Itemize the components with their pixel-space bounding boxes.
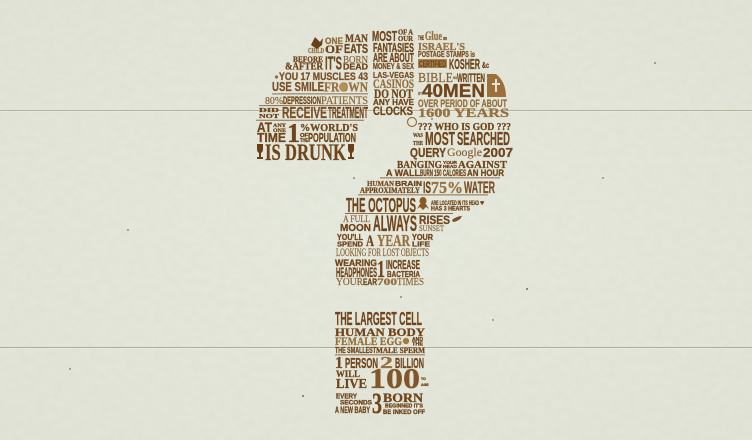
fact: who is god most searched query: 2007 bbox=[483, 146, 513, 160]
fact: headphones increase ear bacteria: WEARING bbox=[335, 258, 377, 269]
fact: 1 person in 2 billion will live to 100: LIVE bbox=[336, 376, 367, 391]
fact: fantasies about money and sex bbox=[372, 28, 414, 71]
fact: one percent is drunk: IS DRUNK bbox=[265, 140, 346, 165]
fact: man eats: CHILD bbox=[308, 47, 324, 55]
fact: 1 person in 2 billion will live to 100 bbox=[335, 353, 429, 395]
fact: las vegas casinos have no clocks: LAS-VEGAS bbox=[373, 70, 414, 80]
fact: the octopus has 3 hearts: THE OCTOPUS bbox=[346, 194, 416, 217]
icon: compass bbox=[408, 118, 416, 126]
fact: muscles to smile and frown: YOU 17 MUSCLES 43 bbox=[279, 71, 368, 83]
fact: every 3 seconds a new baby is born: A NEW BABY bbox=[335, 405, 370, 415]
fact: headphones increase ear bacteria: 1 bbox=[377, 257, 385, 283]
fact: man eats: ONE bbox=[325, 36, 343, 46]
fact: fantasies about money and sex: FANTASIES bbox=[373, 41, 414, 55]
fact: banging your head against a wall: A WALL bbox=[386, 168, 420, 179]
fact: muscles to smile and frown bbox=[272, 71, 368, 96]
fact: israeli postage stamps kosher: ISRAEL'S bbox=[418, 42, 465, 53]
fact: fantasies about money and sex: MOST bbox=[372, 28, 397, 45]
fact: bible written by 40 men over 1600 years: BIBLE bbox=[418, 70, 453, 85]
fact: a full moon always rises at sunset: A FULL bbox=[343, 214, 370, 224]
fact: man eats: EATS bbox=[344, 41, 368, 56]
fact: human brain is 75 percent water: HUMAN bbox=[367, 180, 394, 188]
fact: 1 person in 2 billion will live to 100: 100 bbox=[369, 364, 420, 395]
fact: before and after: BORN bbox=[343, 55, 368, 66]
fact: banging your head against a wall: HEAD bbox=[443, 164, 458, 169]
fact: human brain is 75 percent water: 75% bbox=[431, 178, 463, 197]
fact: who is god most searched query bbox=[410, 122, 513, 160]
fact: banging your head against a wall: BURN 150 CALORIES bbox=[420, 168, 466, 178]
fact: muscles to smile and frown: USE SMILE bbox=[272, 80, 324, 94]
fact: bible written by 40 men over 1600 years: BY bbox=[418, 91, 422, 96]
fact: 1 person in 2 billion will live to 100: WILL bbox=[336, 370, 360, 380]
fact: spend a year looking for lost objects: YOU'LL bbox=[337, 233, 363, 242]
fact: fantasies about money and sex: OUR bbox=[398, 35, 414, 43]
fact: every 3 seconds a new baby is born: BE INKED OFF bbox=[383, 409, 425, 416]
fact: israeli postage stamps kosher: POSTAGE STAMPS is bbox=[418, 49, 475, 59]
fact: bible written by 40 men over 1600 years: OVER PERIOD OF ABOUT bbox=[418, 98, 507, 110]
fact: spend a year looking for lost objects: LIFE bbox=[412, 240, 430, 248]
fact: largest cell and smallest cell: FEMALE EGG bbox=[335, 334, 402, 348]
fact: depression patients: DEPRESSION bbox=[283, 95, 321, 107]
fact: largest cell and smallest cell: HUMAN BODY bbox=[335, 327, 426, 339]
fact: bible written by 40 men over 1600 years: was bbox=[453, 75, 457, 80]
fact: human brain is 75 percent water: BRAIN bbox=[395, 181, 422, 188]
fact: human brain is 75 percent water: IS bbox=[423, 179, 431, 197]
question mark built from typographic facts: TREATMENT bbox=[328, 105, 368, 122]
fact: one percent is drunk: THE bbox=[300, 138, 309, 144]
fact: human brain is 75 percent water: WATER bbox=[464, 179, 495, 197]
fact: before and after: BEFORE bbox=[293, 54, 323, 64]
fact: every 3 seconds a new baby is born: EVERY bbox=[336, 392, 357, 400]
fact: spend a year looking for lost objects: LOOKING FOR LOST OBJECTS bbox=[336, 247, 429, 259]
fact: headphones increase ear bacteria: YOUR bbox=[336, 277, 363, 288]
fact: who is god most searched query: SEARCHED bbox=[457, 129, 510, 149]
fact: who is god most searched query: ??? WHO IS GOD ??? bbox=[418, 122, 511, 133]
fact: who is god most searched query: WAS bbox=[413, 132, 423, 139]
fact: spend a year looking for lost objects: YOUR bbox=[412, 233, 433, 242]
fact: the octopus has 3 hearts: ♥ bbox=[480, 200, 484, 207]
fact: who is god most searched query: QUERY bbox=[410, 146, 447, 160]
fact: 1 person in 2 billion will live to 100: 1 bbox=[335, 353, 343, 372]
fact: every 3 seconds a new baby is born: SECONDS bbox=[340, 400, 372, 406]
fact: las vegas casinos have no clocks bbox=[373, 70, 414, 118]
fact: fantasies about money and sex: ARE ABOUT bbox=[373, 51, 414, 65]
fact: largest cell and smallest cell: THE bbox=[412, 342, 424, 348]
fact: human brain is 75 percent water bbox=[358, 178, 495, 197]
fact: spend a year looking for lost objects bbox=[336, 231, 433, 259]
fact: one percent is drunk: OF bbox=[300, 133, 308, 139]
fact: largest cell and smallest cell: THE LARGEST CELL bbox=[335, 309, 422, 329]
fact: banging your head against a wall bbox=[380, 159, 508, 179]
fact: one percent is drunk: ONE bbox=[273, 128, 286, 134]
question mark built from typographic facts bbox=[256, 28, 513, 420]
fact: headphones increase ear bacteria: EAR bbox=[363, 277, 377, 287]
fact: headphones increase ear bacteria bbox=[335, 257, 424, 288]
fact: largest cell and smallest cell: MALE SPERM bbox=[376, 345, 425, 355]
fact: las vegas casinos have no clocks: ANY HAVE bbox=[373, 97, 414, 107]
fact: fantasies about money and sex: MONEY & SEX bbox=[373, 61, 414, 71]
fact: largest cell and smallest cell bbox=[335, 309, 426, 355]
fact: a full moon always rises at sunset: SUNSET bbox=[419, 223, 445, 233]
fact: 1 person in 2 billion will live to 100: BILLION bbox=[395, 355, 424, 372]
fact: 1 person in 2 billion will live to 100: 2 bbox=[380, 353, 393, 372]
fact: a full moon always rises at sunset: ALWAYS bbox=[373, 211, 417, 236]
fact: before and after bbox=[285, 54, 368, 74]
fact: man eats: MAN bbox=[345, 31, 368, 45]
fact: did not receive treatment bbox=[256, 105, 368, 122]
fact: headphones increase ear bacteria: 700 bbox=[377, 278, 397, 288]
fact: every 3 seconds a new baby is born: 3 bbox=[372, 387, 382, 420]
fact: 1 person in 2 billion will live to 100: PERSON bbox=[345, 355, 378, 372]
fact: who is god most searched query: Google bbox=[447, 145, 482, 159]
fact: spend a year looking for lost objects: A bbox=[366, 233, 374, 250]
fact: las vegas casinos have no clocks: DO NOT bbox=[374, 87, 414, 101]
fact: israeli postage stamps kosher: on bbox=[443, 36, 447, 42]
fact: did not receive treatment: NOT bbox=[259, 113, 280, 120]
fact: banging your head against a wall: AGAINST bbox=[458, 159, 508, 171]
fact: who is god most searched query: MOST bbox=[425, 129, 455, 149]
fact: israeli postage stamps kosher: THE bbox=[418, 36, 424, 42]
fact: before and after: DEAD bbox=[343, 62, 368, 72]
fact: the octopus has 3 hearts: ARE LOCATED IN ITS HEAD bbox=[431, 200, 479, 207]
fact: a full moon always rises at sunset: MOON bbox=[340, 222, 371, 234]
fact: depression patients: PATIENTS bbox=[321, 93, 368, 107]
fact: before and after: &AFTER bbox=[285, 62, 324, 72]
fact: bible written by 40 men over 1600 years: 40MEN bbox=[422, 80, 485, 101]
fact: one percent is drunk: %WORLD'S bbox=[300, 122, 358, 134]
fact: a full moon always rises at sunset: RISES bbox=[419, 213, 450, 227]
fact: 1 person in 2 billion will live to 100: TO bbox=[421, 377, 426, 381]
fact: who is god most searched query: THE bbox=[413, 140, 423, 147]
fact: one percent is drunk: AT bbox=[257, 119, 272, 135]
fact: muscles to smile and frown: FROWN bbox=[324, 80, 368, 96]
fact: israeli postage stamps kosher bbox=[418, 28, 489, 73]
fact: one percent is drunk: POPULATION bbox=[308, 131, 356, 145]
fact: did not receive treatment: DID bbox=[259, 107, 280, 114]
fact: bible written by 40 men over 1600 years: WRITTEN bbox=[457, 71, 485, 85]
fact: banging your head against a wall: YOUR bbox=[443, 160, 458, 165]
fact: las vegas casinos have no clocks: CLOCKS bbox=[373, 106, 413, 118]
fact: fantasies about money and sex: OF A bbox=[398, 28, 413, 36]
fact: one percent is drunk: ANY bbox=[273, 123, 286, 129]
fact: bible written by 40 men over 1600 years bbox=[418, 70, 509, 120]
fact: the octopus has 3 hearts: HAS 3 HEARTS bbox=[431, 206, 471, 212]
fact: before and after: IT'S bbox=[325, 54, 342, 74]
fact: one percent is drunk bbox=[257, 118, 358, 165]
fact: largest cell and smallest cell: THE SMALLEST bbox=[335, 345, 377, 355]
fact: depression patients: 80% bbox=[265, 96, 283, 107]
fact: human brain is 75 percent water: APPROXIMATELY bbox=[360, 186, 420, 195]
fact: depression patients bbox=[259, 93, 368, 107]
fact: headphones increase ear bacteria: HEADPHONES bbox=[336, 264, 377, 280]
fact: spend a year looking for lost objects: YEAR bbox=[377, 231, 410, 250]
fact: man eats bbox=[308, 31, 368, 56]
fact: every 3 seconds a new baby is born: BEGINNED IT'S bbox=[385, 404, 423, 410]
fact: one percent is drunk: TIME bbox=[257, 131, 286, 145]
fact: spend a year looking for lost objects: SPEND bbox=[337, 240, 364, 248]
fact: israeli postage stamps kosher: Glue bbox=[425, 28, 442, 43]
fact: did not receive treatment: RECEIVE bbox=[282, 105, 327, 122]
fact: banging your head against a wall: BANGING bbox=[397, 159, 442, 171]
fact: las vegas casinos have no clocks: CASINOS bbox=[373, 76, 414, 91]
fact: 1 person in 2 billion will live to 100: AGE bbox=[421, 383, 429, 387]
fact: bible written by 40 men over 1600 years: 1600 YEARS bbox=[418, 106, 509, 120]
fact: israeli postage stamps kosher: &c bbox=[482, 61, 489, 70]
fact: man eats: OF bbox=[325, 42, 343, 56]
fact: every 3 seconds a new baby is born: BORN bbox=[383, 391, 423, 405]
fact: one percent is drunk: 1 bbox=[287, 118, 300, 148]
fact: israeli postage stamps kosher: CERTIFIED bbox=[419, 59, 446, 69]
fact: banging your head against a wall: AN HOUR bbox=[467, 168, 504, 179]
fact: israeli postage stamps kosher: KOSHER bbox=[449, 56, 480, 73]
fact: headphones increase ear bacteria: INCREASE bbox=[386, 258, 420, 272]
fact: headphones increase ear bacteria: TIMES bbox=[397, 277, 424, 288]
fact: largest cell and smallest cell: AND bbox=[412, 337, 423, 343]
fact: every 3 seconds a new baby is born bbox=[335, 387, 425, 420]
fact: headphones increase ear bacteria: BACTERIA bbox=[387, 269, 420, 279]
